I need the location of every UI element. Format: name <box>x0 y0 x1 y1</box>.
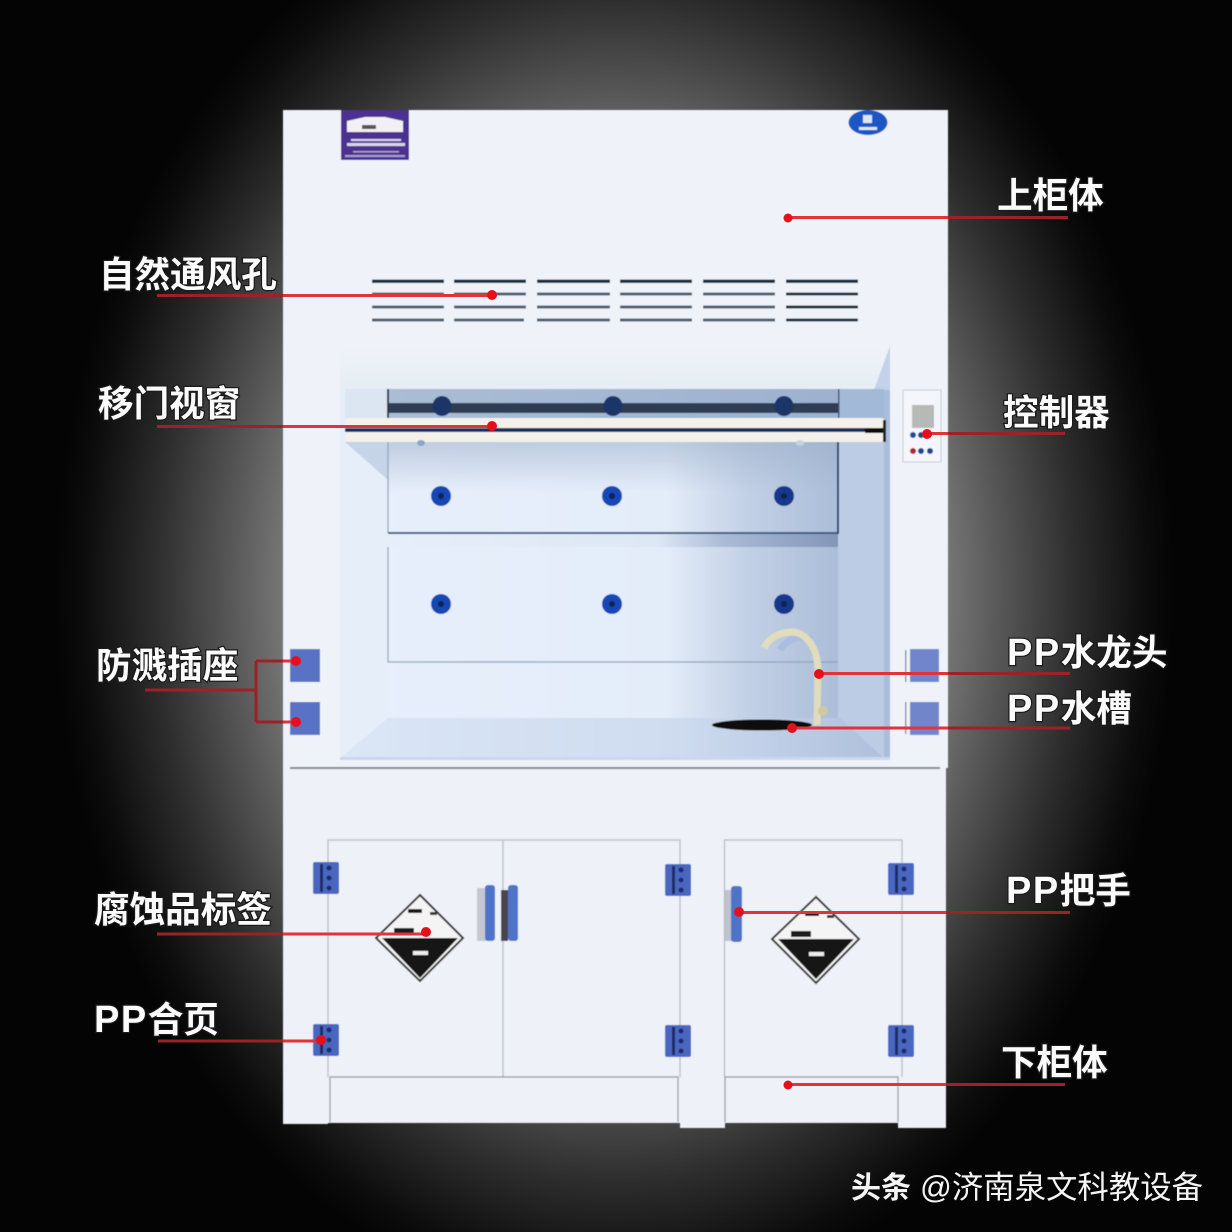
leader: upper cabinet <box>784 214 1068 222</box>
label: lower cabinet: 下柜体 <box>1001 1043 1108 1083</box>
leader: corrosive label <box>157 927 431 937</box>
ventilation slots <box>372 280 858 322</box>
logo plate <box>341 110 409 160</box>
leader: sockets bracket <box>145 656 301 727</box>
leader: lower cabinet <box>784 1080 1065 1090</box>
label: sockets: 防溅插座 <box>96 646 238 686</box>
lower cabinet body <box>283 767 946 1128</box>
label: upper cabinet: 上柜体 <box>997 176 1104 216</box>
splash-proof sockets <box>290 649 939 735</box>
leader: handle <box>734 907 1070 917</box>
fume hood cabinet <box>283 110 948 1128</box>
faucet <box>764 632 828 725</box>
label: faucet: PP水龙头 <box>1007 632 1167 674</box>
leader: sliding window <box>157 421 497 431</box>
watermark <box>851 1170 1203 1205</box>
label: sliding window: 移门视窗 <box>98 384 240 424</box>
controller panel <box>903 390 941 462</box>
label: natural vent: 自然通风孔 <box>99 255 277 295</box>
label: handle: PP把手 <box>1006 870 1131 912</box>
leader: controller <box>922 429 1065 439</box>
sliding sash window <box>345 418 886 446</box>
leader: natural vent <box>157 290 497 300</box>
corrosive label left <box>376 895 463 981</box>
hood opening interior <box>340 346 890 760</box>
ceiling rail with knobs <box>388 396 838 416</box>
hinges <box>313 862 914 1057</box>
door handles <box>477 885 742 942</box>
cabinet doors <box>328 840 902 1122</box>
sink <box>712 720 812 730</box>
label: hinge: PP合页 <box>94 999 219 1041</box>
label: sink: PP水槽 <box>1007 688 1132 730</box>
certification badge <box>848 110 888 135</box>
corrosive label right <box>772 897 859 983</box>
label: controller: 控制器 <box>1003 393 1110 433</box>
label: corrosive label: 腐蚀品标签 <box>94 890 272 930</box>
leader: sink <box>787 723 1070 733</box>
watermark brand: 头条 <box>851 1172 911 1205</box>
leader: faucet <box>814 669 1070 679</box>
back panel bolts <box>431 486 794 614</box>
leader: hinge <box>158 1035 326 1045</box>
upper cabinet body <box>283 110 948 768</box>
watermark account: @济南泉文科教设备 <box>920 1170 1203 1205</box>
